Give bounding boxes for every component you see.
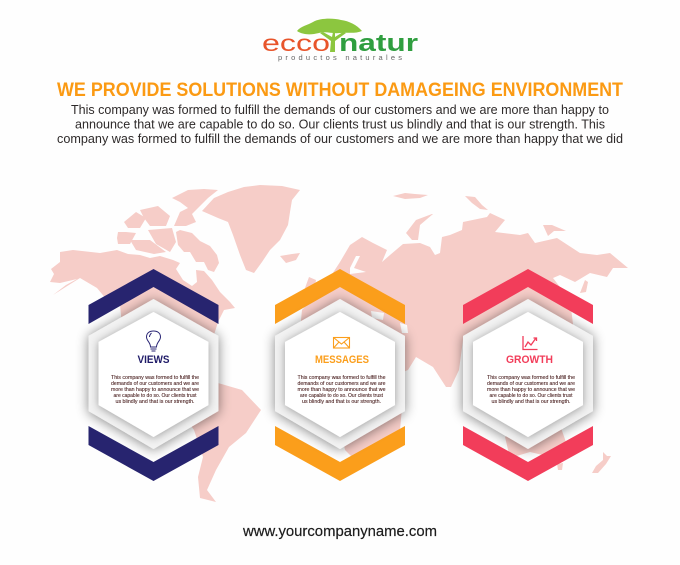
panel: views [88, 269, 218, 481]
bottom chevron [463, 426, 593, 481]
iceland [280, 253, 300, 263]
arctic islands [172, 189, 218, 226]
world map [50, 185, 628, 502]
intro text: This company was formed to fulfill the demands of our customers and we are more than happy to [71, 102, 609, 117]
logo: ecco natur: natur [339, 30, 418, 57]
body text: This company was formed to fulfill the [487, 375, 575, 381]
africa [300, 340, 405, 460]
outer hexagon [463, 299, 593, 449]
body text: are capable to do so. Our clients trust [490, 393, 573, 399]
new zealand [592, 452, 611, 473]
black sea [371, 311, 384, 320]
intro text: company was formed to fulfill the demands of our customers and we are more than happy that we did [57, 131, 623, 146]
top chevron [463, 269, 593, 324]
top chevron [275, 269, 405, 324]
arctic russia islands [393, 193, 428, 199]
body text: more than happy to announce that we [298, 387, 386, 393]
icon: growth chart [523, 336, 538, 350]
body text: are capable to do so. Our clients trust [300, 393, 383, 399]
icon: tree [297, 19, 362, 52]
title: GROWTH [506, 354, 553, 366]
title: VIEWS [138, 354, 170, 366]
body text: more than happy to announce that we [487, 387, 575, 393]
icon: light bulb [146, 331, 160, 351]
body text [111, 375, 199, 405]
british isles [305, 277, 316, 290]
panel: messages [275, 269, 405, 481]
body text: more than happy to announce that we [111, 387, 199, 393]
body text: This company was formed to fulfill the [298, 375, 386, 381]
logo: ecco natur [262, 19, 418, 62]
body text [298, 375, 386, 405]
website footer: www.yourcompanyname.com [242, 523, 437, 540]
body text: us blindly and that is our strength. [492, 399, 571, 405]
body text [487, 375, 575, 405]
body text: demands of our customers and we are [487, 381, 575, 387]
title: MESSAGES [315, 354, 369, 366]
tasmania [557, 463, 563, 470]
inner hexagon [473, 312, 583, 437]
greenland [202, 185, 300, 273]
heading: WE PROVIDE SOLUTIONS WITHOUT DAMAGEING ENVIRONMENT [57, 79, 623, 101]
north america [50, 250, 235, 380]
body text: demands of our customers and we are [111, 381, 199, 387]
inner hexagon [98, 312, 208, 437]
outer hexagon [275, 299, 405, 449]
south america [180, 380, 261, 502]
intro text: announce that we are capable to do so. Our clients trust us blindly and that is our strength. This [75, 116, 605, 132]
quebec and labrador [176, 230, 219, 272]
body text: demands of our customers and we are [298, 381, 386, 387]
bottom chevron [275, 426, 405, 481]
baltic sea [350, 256, 366, 274]
eurasia [300, 213, 628, 387]
inner hexagon [285, 312, 395, 437]
japan [580, 280, 588, 293]
body text: us blindly and that is our strength. [116, 399, 195, 405]
body text: are capable to do so. Our clients trust [114, 393, 197, 399]
body text: us blindly and that is our strength. [302, 399, 381, 405]
outer hexagon [88, 299, 218, 449]
bottom chevron [88, 426, 218, 481]
australia [505, 425, 567, 458]
logo: ecco natur: ecco [262, 30, 330, 56]
intro text [57, 102, 623, 146]
body text: This company was formed to fulfill the [111, 375, 199, 381]
icon: envelope [334, 338, 350, 348]
panel: growth [463, 269, 593, 481]
top chevron [88, 269, 218, 324]
logo: ecco natur: productos naturales [278, 53, 402, 62]
caspian sea [400, 323, 408, 333]
